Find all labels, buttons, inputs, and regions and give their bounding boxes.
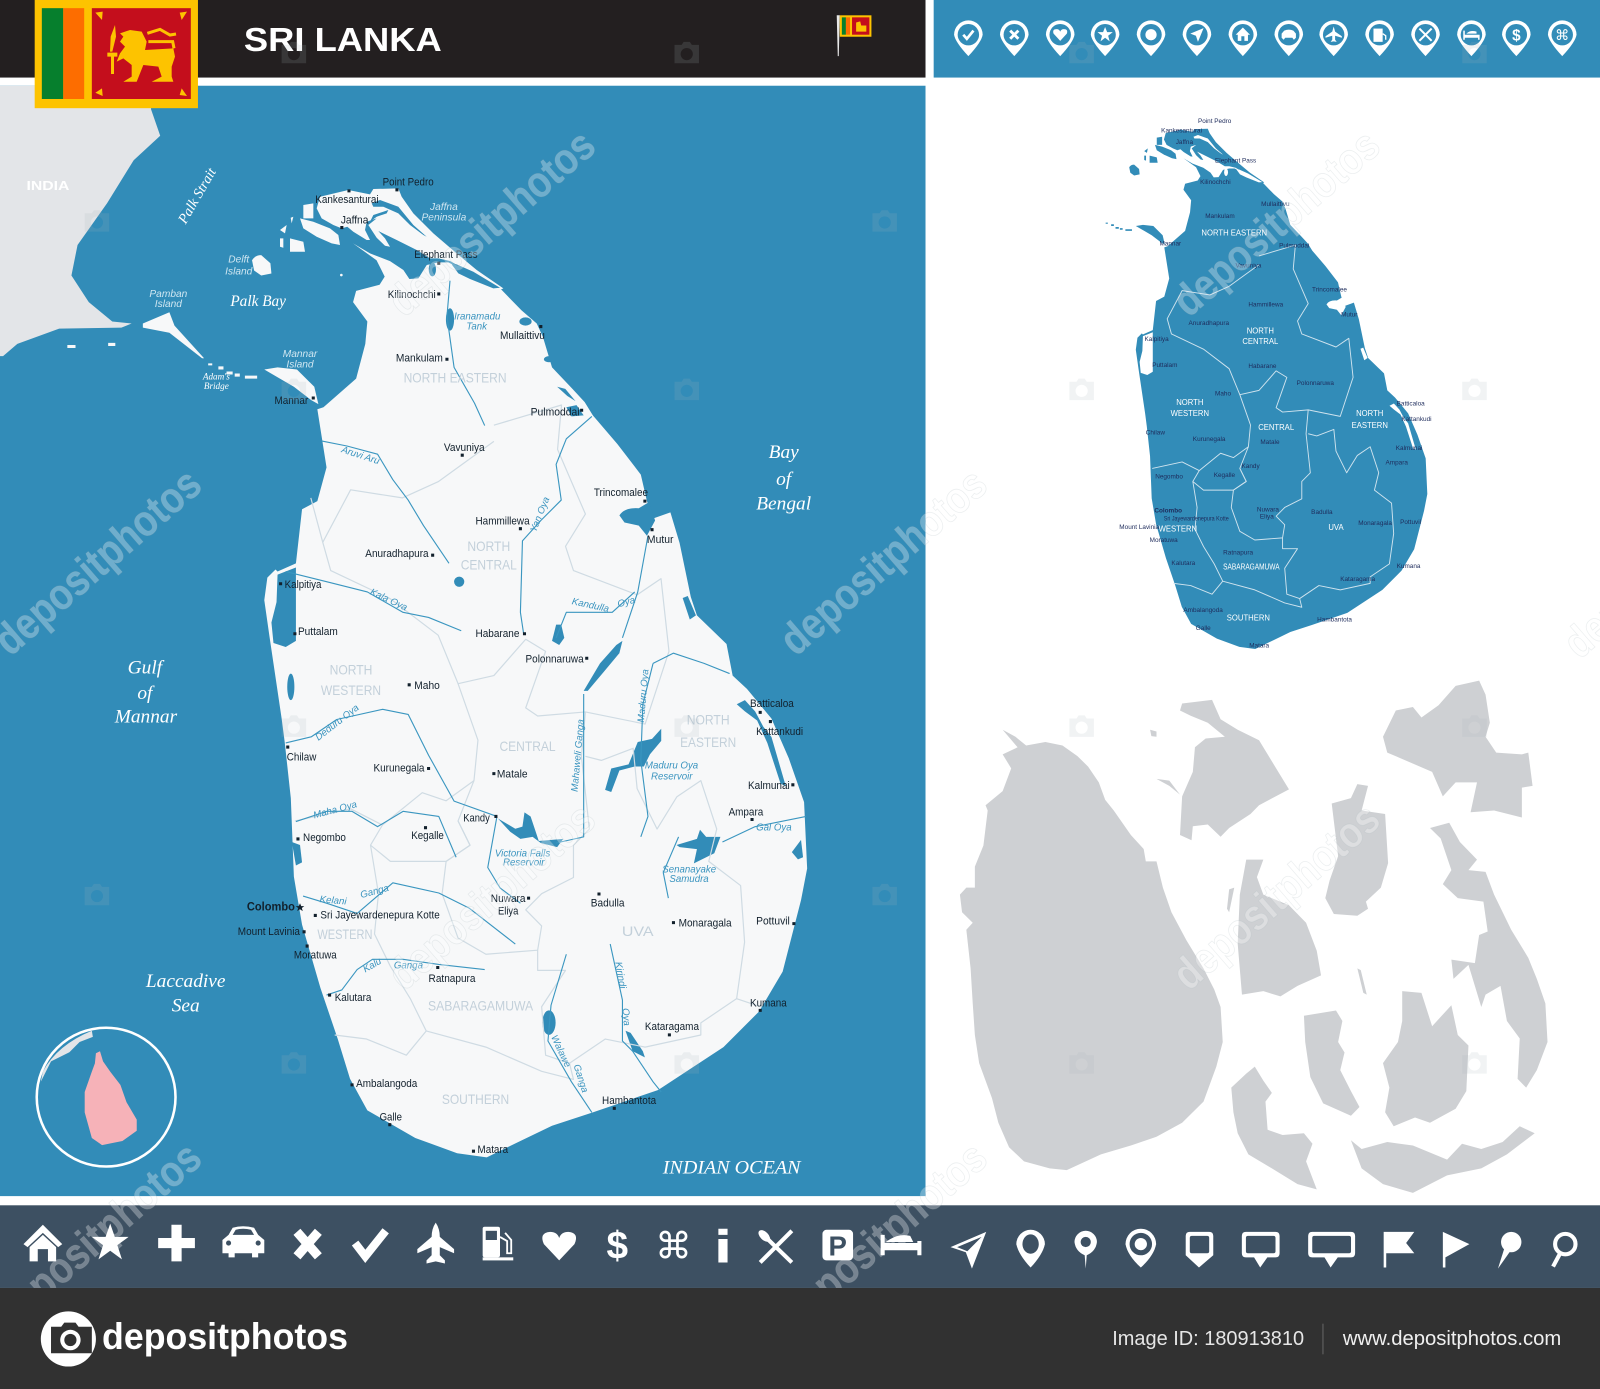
pin: cross [1000,20,1029,56]
river and lake labels: Maduru Oya [645,760,699,771]
city labels: Habarane [476,628,519,640]
blue map labels: Negombo [1155,473,1183,480]
city labels: Hambantota [602,1095,657,1107]
icon: pennant flag [1443,1232,1469,1268]
river and lake labels: Kirindi [612,961,628,990]
river and lake labels [312,311,792,1095]
icon: command: ⌘ [655,1224,692,1267]
water body and island labels: Palk Strait [175,164,220,227]
blue map labels: Point Pedro [1198,118,1232,125]
city labels: Maho [414,680,440,692]
water body and island labels: Island [286,359,314,370]
icon: notched flag [1384,1232,1414,1268]
water body and island labels: of [776,469,794,490]
blue map labels: Badulla [1311,509,1333,516]
footer logo [41,1311,348,1367]
city labels: Colombo [247,899,295,913]
river and lake labels: Kalu [361,956,384,975]
pin: fuel pump [1365,20,1394,56]
watermarks: depositphotos [770,1133,997,1338]
watermarks: depositphotos [1163,120,1389,326]
blue map labels: Eliya [1260,513,1274,520]
water body and island labels: Sea [172,995,200,1016]
icon: car [222,1226,264,1257]
city labels: Batticaloa [750,698,795,710]
city labels: Ampara [729,806,764,818]
water body and island labels: Gulf [128,658,165,679]
river and lake labels: Ganga [571,1063,590,1095]
pin: heart [1046,20,1074,56]
locator inset [37,1028,176,1167]
city labels: Kataragama [645,1021,700,1033]
title: SRI LANKA [244,22,442,59]
city labels: Kandy [463,813,490,825]
province labels: main map: NORTH [687,713,730,729]
river and lake labels: Maha Oya [312,799,359,821]
icon: plus [158,1225,195,1261]
river and lake labels: Oya [616,595,637,610]
city labels: Matara [478,1144,509,1156]
piece: southern [1351,1126,1535,1193]
icon: speech bubble [1242,1232,1280,1268]
blue map labels: Maho [1215,391,1231,398]
blue map labels: Kilinochchi [1200,179,1231,186]
icon: house [23,1225,62,1261]
grey island outline [960,730,1223,1170]
pin: arrow [1183,20,1211,56]
blue map labels: Galle [1196,625,1211,632]
blue map labels: SABARAGAMUWA [1223,562,1280,572]
water body and island labels: of [137,683,155,704]
rivers [286,281,806,1112]
city labels: Moratuwa [294,949,337,961]
blue map labels: CENTRAL [1258,423,1295,432]
city labels: Mount Lavinia [238,926,301,938]
panel: pin icon bar [934,0,1600,78]
icon: target pin [1126,1229,1156,1268]
city labels: Chilaw [287,751,317,763]
icon: fuel pump [483,1227,513,1260]
blue map labels: NORTH [1356,409,1383,418]
water body and island labels: Bengal [756,493,811,514]
blue map labels: Sri Jayewardenepura Kotte [1164,515,1229,523]
city labels: Monaragala [679,918,732,930]
water body and island labels: Pamban [149,289,188,300]
province labels: main map: NORTH [330,663,372,679]
city labels: Elephant Pass [414,249,478,261]
icon: magnifier [1553,1234,1576,1267]
city labels: Galle [380,1112,402,1124]
blue map labels: Kumana [1397,563,1421,570]
blue map labels: Monaragala [1358,520,1392,527]
blue map labels: WESTERN [1159,524,1197,533]
city labels: Anuradhapura [365,548,429,560]
blue map labels: WESTERN [1171,409,1209,418]
icon: navigation arrow [951,1232,986,1269]
watermarks: depositphotos [378,120,605,326]
blue map labels: Mankulam [1205,213,1235,220]
blue map labels [1119,118,1432,650]
city labels: Ratnapura [429,973,476,985]
water body and island labels: Bridge [204,381,229,391]
blue map labels: Kankesanturai [1161,127,1202,134]
footer image id: Image ID: 180913810 [1112,1328,1304,1350]
map: grey silhouette and exploded province pieces [960,681,1548,1193]
icon: parking [822,1230,853,1261]
city labels: Mannar [274,395,308,407]
river and lake labels: Maduru Oya [636,668,652,723]
city labels: Mutur [647,534,674,546]
icon: star [92,1224,129,1259]
icon: check [355,1231,386,1256]
city labels: Sri Jayewardenepura Kotte [320,910,440,922]
blue map labels: Colombo [1154,508,1182,515]
province labels: main map: CENTRAL [461,557,517,573]
footer logo: depositphotos [102,1316,348,1357]
watermarks: depositphotos [770,459,997,665]
lion, sword and corner leaves [95,12,187,96]
water body and island labels [27,164,811,1179]
water body and island labels: Island [155,299,182,310]
province labels: main map: CENTRAL [499,739,556,755]
blue map labels: Kattankudi [1401,416,1432,423]
river and lake labels: Ganga [394,961,424,972]
piece: eastern [1430,823,1548,1088]
blue map labels: Ampara [1386,460,1408,467]
blue map labels: NORTH EASTERN [1201,228,1267,238]
icon: cross [297,1232,318,1256]
blue map labels: Kalmunai [1396,445,1422,452]
city labels: Kumana [750,997,787,1009]
icon: square pin [1186,1232,1213,1268]
province labels: main map: SABARAGAMUWA [428,998,534,1014]
water body and island labels: Adam's [202,372,230,382]
river and lake labels: Aruvi Aru [339,444,381,467]
city labels: Polonnaruwa [526,653,584,665]
lakes and reservoirs [446,308,720,1057]
water body and island labels: Bay [769,442,799,463]
pin: bed [1457,20,1486,56]
blue map labels: Kalutara [1171,560,1196,567]
footer website: www.depositphotos.com [1342,1328,1561,1350]
province borders: main map [295,405,761,1079]
blue map labels: Jaffna [1176,139,1193,146]
blue map labels: Elephant Pass [1215,158,1256,165]
river and lake labels: Tank [466,322,488,333]
map: blue province map [1106,118,1432,650]
city labels [238,177,803,1156]
india landmass [0,86,160,356]
blue map labels: Kalpitiya [1145,336,1169,343]
icon: thin pin [1074,1231,1097,1269]
blue map labels: Kurunegala [1193,436,1226,443]
piece: western [1231,1067,1317,1189]
river and lake labels: Iranamadu [454,311,501,322]
icon: parking: P [829,1230,847,1261]
city labels: Trincomalee [594,487,648,499]
water body and island labels: Palk Bay [229,293,286,310]
icon: plane [417,1223,454,1263]
blue map labels: Ratnapura [1223,550,1253,557]
blue map labels: Pulmoddai [1279,243,1309,250]
city labels: Vavuniya [444,442,485,454]
blue map labels: Puttalam [1152,362,1177,369]
blue map labels: Habarane [1248,363,1277,370]
pin: command [1548,20,1577,56]
blue map labels: NORTH [1247,326,1274,336]
jaffna peninsula and islands [280,188,503,290]
city labels: Nuwara [491,893,526,905]
blue map labels: Mannar [1159,240,1182,248]
city labels: Puttalam [298,626,338,638]
blue map labels: Pottuvil [1400,519,1421,526]
city labels: Badulla [591,897,625,909]
river and lake labels: Senanayake [662,865,717,876]
city labels: Pottuvil [756,916,790,928]
piece: north western [1325,784,1388,916]
river and lake labels: Yan Oya [528,495,553,534]
city labels: Kankesanturai [315,194,379,206]
pin: dollar: $ [1512,27,1521,44]
river and lake labels: Victoria Falls [495,848,550,859]
river and lake labels: Reservoir [503,857,545,868]
panel: pictogram icon bar [0,1205,1600,1288]
province labels: main map: UVA [622,924,654,940]
piece: uva [1383,991,1468,1126]
blue map labels: Moratuwa [1150,537,1178,544]
province labels: main map: NORTH [467,539,510,555]
water body and island labels: Laccadive [145,971,226,992]
icon: heart [542,1232,576,1260]
city labels: Kalpitiya [285,579,322,591]
water body and island labels: Mannar [283,349,318,360]
water body and island labels: Island [225,267,253,278]
pictogram icons [23,1223,1576,1269]
city labels: Ambalangoda [356,1078,418,1090]
icon: large national flag [35,0,198,108]
pin: dollar [1502,20,1531,56]
watermark cameras [85,42,1487,1074]
river and lake labels: Deduru Oya [313,702,362,743]
icon: dollar: $ [607,1224,629,1267]
icon: info [718,1229,728,1262]
river and lake labels: Gal Oya [756,823,792,834]
blue map labels: Anuradhapura [1189,320,1229,327]
blue map labels: SOUTHERN [1227,614,1270,623]
city labels: Kalmunai [748,780,790,792]
icon: wide speech bubble [1308,1232,1355,1268]
city labels: Hammillewa [476,516,530,528]
pin icons row [954,20,1577,56]
pin: dot [1137,20,1165,56]
blue map province borders [1152,245,1394,607]
city labels: Kilinochchi [388,289,436,301]
blue map labels: Kataragama [1340,576,1375,583]
province labels: main map [317,371,736,1108]
footer band [0,1288,1600,1389]
blue map labels: Kegalle [1214,472,1235,479]
water body and island labels: Delft [228,254,250,265]
icon: fork and knife [756,1228,792,1262]
city labels: Mankulam [396,352,443,364]
river and lake labels: Kelani [319,894,348,908]
blue map labels: Vavuniya [1236,263,1262,270]
pin: command: ⌘ [1555,28,1569,44]
city labels: Kegalle [411,830,444,842]
province labels: main map: SOUTHERN [442,1092,509,1108]
city markers [279,188,795,1153]
province labels: main map: WESTERN [317,927,372,943]
pin: car [1274,20,1303,56]
blue map labels: Chilaw [1146,430,1165,437]
blue island silhouette [1106,129,1427,649]
city labels: Eliya [498,905,519,917]
blue map labels: Nuwara [1257,506,1279,513]
blue map labels: Mullaittivu [1261,201,1290,208]
icon: push pin [1498,1232,1521,1269]
blue map labels: Hammillewa [1248,302,1284,309]
city labels: Jaffna [341,215,369,227]
river and lake labels: Mahaweli Ganga [570,718,587,792]
river and lake labels: Walawe [548,1034,573,1070]
blue map labels: Ambalangoda [1183,607,1223,614]
river and lake labels: Samudra [669,874,709,885]
inset: sri lanka in pink [85,1051,137,1145]
pin: cutlery [1411,20,1440,56]
icon: map pin [1016,1230,1045,1268]
water body and island labels: Jaffna [429,202,458,213]
province labels: main map: WESTERN [321,683,381,699]
piece: north central [1383,681,1533,817]
province labels: main map: EASTERN [680,735,736,751]
lagoons and coastal water [271,200,803,1057]
province labels: main map: NORTH EASTERN [404,371,507,387]
blue map labels: Matale [1260,439,1280,446]
blue map labels: Mutur [1341,312,1358,319]
panel: detailed map background [0,86,926,1196]
blue map labels: EASTERN [1352,421,1388,430]
pin: star [1091,20,1119,56]
blue map labels: Batticaloa [1397,401,1425,408]
city labels: Negombo [303,832,346,844]
city labels: Kurunegala [373,763,425,775]
water body and island labels: INDIA [27,178,70,193]
city labels: Kattankudi [756,726,803,738]
header bar [0,0,926,78]
blue map labels: Matara [1249,643,1270,650]
water body and island labels: Mannar [114,707,178,728]
blue map labels: Trincomalee [1312,286,1347,293]
blue map labels: UVA [1328,523,1344,532]
pin: plane [1319,20,1348,56]
water body and island labels: INDIAN OCEAN [662,1158,802,1179]
river and lake labels: Reservoir [651,772,693,783]
piece: north [1150,700,1289,840]
blue map labels: Mount Lavinia [1119,524,1160,531]
piece: central [1227,860,1367,996]
blue map labels: Hambantota [1317,617,1352,624]
city labels: Point Pedro [383,177,434,189]
icon: bed [881,1235,921,1255]
river and lake labels: Kala Oya [368,587,409,614]
city labels: Mullaittivu [500,330,545,342]
blue map labels: CENTRAL [1242,337,1279,346]
city labels: Pulmoddai [531,406,580,418]
river and lake labels: Ganga [359,883,391,901]
watermarks: depositphotos [1163,794,1389,1000]
piece: sabaragamuwa [1304,1010,1359,1116]
map: main island land [67,188,807,1157]
river and lake labels: Kandulla [571,596,611,615]
inset: india [41,1031,93,1082]
river and lake labels: Oya [619,1008,632,1027]
icon: small pennant flag [837,15,871,56]
pin: house [1229,20,1257,56]
city labels: Kalutara [335,992,372,1004]
blue map labels: Polonnaruwa [1297,380,1334,387]
water body and island labels: Peninsula [422,212,467,223]
blue map labels: Kandy [1242,463,1260,470]
blue map labels: NORTH [1176,398,1203,407]
city labels: Matale [497,769,528,781]
watermarks: depositphotos [378,794,605,1000]
pin: check [954,20,983,56]
